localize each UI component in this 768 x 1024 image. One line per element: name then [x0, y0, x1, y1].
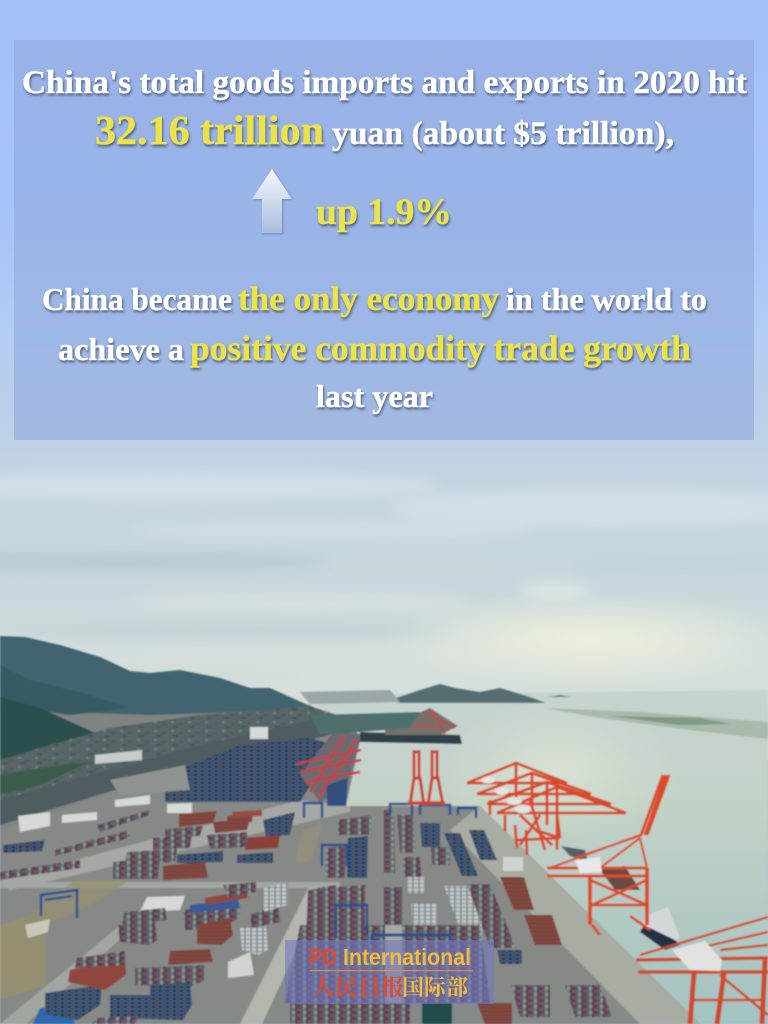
ship beside crane: [561, 846, 680, 950]
mountains: [0, 636, 340, 810]
big orange crane: [547, 775, 669, 935]
statement line 2: positive commodity trade growth: [190, 329, 691, 368]
statement line 1: in the world to: [506, 281, 707, 317]
watermark: PD International: 国际部: [402, 975, 468, 1000]
sky with clouds: [0, 0, 768, 760]
roads: [0, 800, 700, 1024]
translucent text panel: [14, 40, 754, 440]
port ground: [0, 735, 700, 1024]
statement line 1: [42, 281, 707, 318]
statement line 1: China became: [42, 281, 232, 317]
far yard and far cranes: [165, 708, 462, 806]
watermark: PD International: International: [343, 944, 471, 970]
watermark: PD International: [285, 940, 494, 1004]
container stacks: [0, 810, 612, 1024]
near right crane: [636, 917, 768, 1024]
statement line 1: the only economy: [238, 281, 499, 318]
distant headland and sandbars: [300, 684, 768, 739]
heading line 2: [95, 107, 674, 153]
twin red towers: [408, 750, 445, 805]
heading line 2: yuan (about $5 trillion),: [332, 116, 674, 152]
statement text block: [42, 281, 707, 414]
watermark: PD International: 人民日报: [312, 975, 404, 1000]
statement line 2: achieve a: [58, 331, 184, 367]
orange crane group: [467, 763, 626, 855]
crane machinery house: [575, 857, 602, 873]
crane white cab near: [672, 941, 722, 971]
heading line 1: China's total goods imports and exports in 2020 hit: [22, 65, 747, 101]
heading line 2: 32.16 trillion: [95, 107, 324, 153]
land base: [0, 690, 700, 1024]
statement line 3: last year: [316, 378, 433, 414]
growth figure: up 1.9%: [316, 192, 452, 233]
icon: up arrow: [252, 169, 292, 233]
port buildings: [18, 727, 268, 912]
watermark: PD International: PD: [309, 944, 337, 970]
sea: [300, 690, 768, 1024]
blue gantries: [41, 803, 476, 945]
crane cabs: [481, 776, 531, 814]
